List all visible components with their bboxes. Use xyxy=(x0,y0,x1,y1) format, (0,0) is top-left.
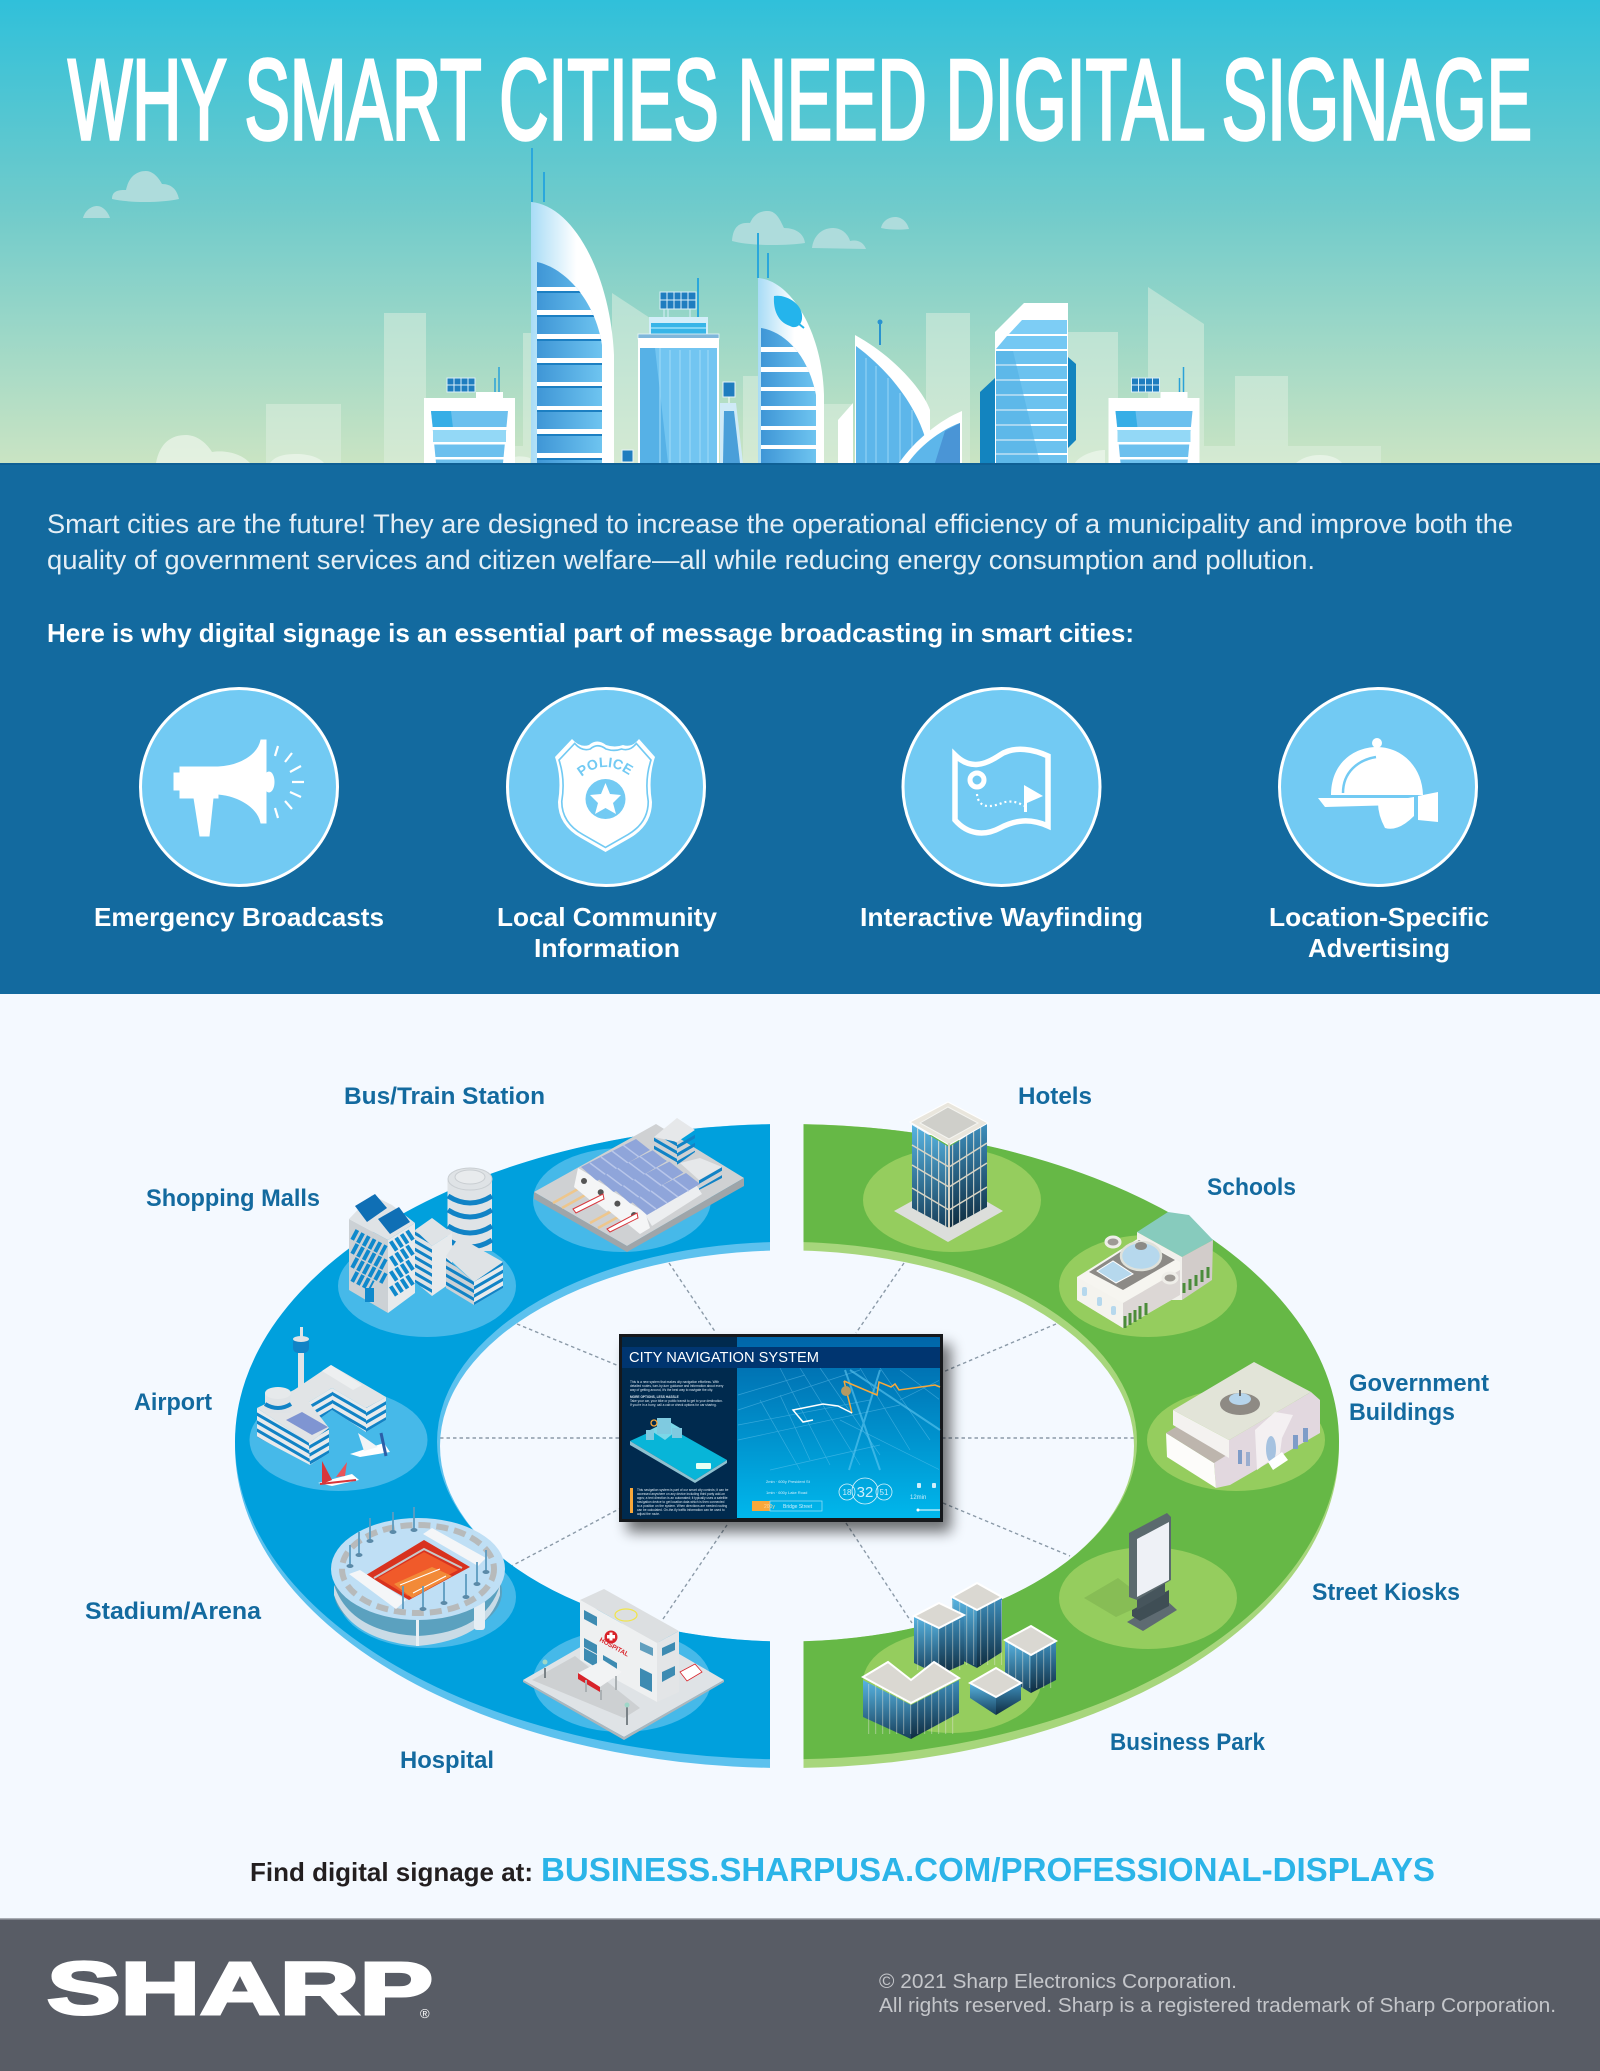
monitor dashboard: Bridge Street xyxy=(783,1504,813,1510)
left panel xyxy=(622,1337,737,1519)
tower three xyxy=(1005,1626,1056,1693)
monitor body text: If you're in a hurry, call a cab or check options for car sharing. xyxy=(630,1403,717,1407)
illustration: street kiosk xyxy=(1084,1513,1177,1631)
monitor body text: to a position on the system. When directions are needed routing xyxy=(637,1504,727,1508)
header sky panel xyxy=(0,0,1600,464)
monitor body text: can be calculated. On-the-fly traffic information can be used to xyxy=(637,1508,725,1512)
copyright: All rights reserved. Sharp is a registered trademark of Sharp Corporation. xyxy=(879,1995,1556,2017)
tower one xyxy=(914,1603,964,1675)
monitor body text: accessed anywhere on any device including third party add-on xyxy=(637,1492,725,1496)
icon: megaphone xyxy=(174,740,304,836)
monitor dashboard: 200y xyxy=(764,1504,775,1510)
copyright xyxy=(879,1971,1556,2017)
label: shopping malls: Shopping Malls xyxy=(146,1185,320,1212)
label: street kiosks: Street Kiosks xyxy=(1312,1579,1460,1606)
illustration: shopping malls xyxy=(349,1168,503,1313)
title band xyxy=(622,1347,940,1368)
monitor body text: adjust the route. xyxy=(637,1512,660,1516)
building: curved glass tower xyxy=(838,320,962,463)
intro text: Smart cities are the future! They are designed to increase the operational efficiency of a municipality and improve both the xyxy=(47,509,1513,539)
monitor dashboard: 2min · 600y President St xyxy=(766,1479,811,1484)
entrance canopy xyxy=(578,1660,622,1687)
illustration: airport xyxy=(257,1327,390,1486)
small block xyxy=(970,1668,1021,1715)
central monitor xyxy=(619,1334,951,1532)
monitor body text xyxy=(630,1380,729,1516)
tall block with solar roof xyxy=(349,1219,388,1313)
item: local community information: Local Community xyxy=(497,902,718,932)
building: right small tower xyxy=(1108,367,1200,464)
label: stadium/arena: Stadium/Arena xyxy=(85,1598,262,1625)
tower two xyxy=(952,1583,1002,1668)
hospital sign xyxy=(604,1630,618,1644)
sharp logo xyxy=(47,1947,433,2030)
icon: map with flag xyxy=(955,749,1048,833)
low block xyxy=(446,1237,503,1282)
subheading: Here is why digital signage is an essential part of message broadcasting in smart cities: xyxy=(47,618,1134,648)
label: government buildings: Buildings xyxy=(1349,1399,1455,1426)
illustration: stadium xyxy=(331,1507,505,1646)
trains xyxy=(573,1194,638,1232)
monitor body text: This is a new system that makes city navigation effortless. With xyxy=(630,1380,719,1384)
illustration: hospital xyxy=(523,1589,724,1740)
ring: right green half xyxy=(804,1124,1339,1768)
label: business park: Business Park xyxy=(1110,1729,1266,1756)
illustration: hotel xyxy=(894,1102,1003,1242)
call to action: Find digital signage at: xyxy=(250,1857,533,1887)
label: hotels: Hotels xyxy=(1018,1083,1092,1110)
illustration: bus/train station xyxy=(534,1118,744,1252)
monitor dashboard: 32 xyxy=(857,1484,873,1501)
monitor body text: Take your car, your bike or public transit to get to your destination. xyxy=(630,1399,723,1403)
lamp posts xyxy=(545,1668,627,1725)
monitor dashboard: 1min · 600y Lake Road xyxy=(766,1490,807,1495)
building: angular tower xyxy=(980,303,1076,463)
illustration: business park xyxy=(863,1583,1056,1739)
lower terminal wing xyxy=(257,1387,329,1465)
illustration: school xyxy=(1077,1212,1213,1328)
map panel xyxy=(737,1337,940,1518)
label: bus/train station: Bus/Train Station xyxy=(344,1083,545,1110)
item: local community information: Information xyxy=(534,933,680,963)
dotted connector lines xyxy=(440,1263,1134,1623)
mid block xyxy=(415,1218,452,1246)
monitor dashboard xyxy=(752,1478,940,1512)
item: local community information xyxy=(497,687,718,963)
monitor body text: MORE OPTIONS, LESS HASSLE xyxy=(630,1395,679,1399)
upper terminal wing xyxy=(291,1365,386,1432)
monitor dashboard: 51 xyxy=(880,1488,889,1497)
label: schools: Schools xyxy=(1207,1174,1296,1201)
label: hospital: Hospital xyxy=(400,1747,494,1774)
monitor body text: This navigation system is part of our smart city controls; it can be xyxy=(637,1488,729,1492)
monitor isometric phone graphic xyxy=(630,1418,727,1483)
icon: police badge: POLICE xyxy=(576,758,634,776)
control tower xyxy=(293,1327,309,1392)
footer xyxy=(0,1918,1600,2071)
panel: intro xyxy=(0,463,1600,994)
monitor body text: navigation device to get location data which is then connected xyxy=(637,1500,725,1504)
foreground pale clouds xyxy=(156,435,1342,463)
illustration: government building xyxy=(1166,1362,1320,1488)
sharp logo: ® xyxy=(420,2006,430,2021)
cylinder tower xyxy=(448,1168,492,1251)
icon: leaf xyxy=(774,296,804,328)
monitor body text: way of getting around, it's the best way to navigate the city. xyxy=(630,1388,713,1392)
monitor body text: apps; a text direction is an automated; it typically uses a satellite xyxy=(637,1496,728,1500)
title band: CITY NAVIGATION SYSTEM xyxy=(629,1350,819,1366)
intro text: quality of government services and citizen welfare—all while reducing energy consumption and pollution. xyxy=(47,545,1315,575)
building: solar roof glass tower xyxy=(638,278,719,464)
ring labels xyxy=(85,1083,1489,1774)
building: tall sail tower xyxy=(531,148,614,463)
ring: left blue half xyxy=(235,1124,770,1768)
L-shaped block xyxy=(863,1662,959,1739)
monitor dashboard: 18 xyxy=(843,1488,852,1497)
planes xyxy=(318,1433,390,1486)
building: left small tower xyxy=(424,367,515,464)
building: small solar annex xyxy=(622,382,743,463)
item: emergency broadcasts xyxy=(94,688,384,932)
item: location-specific advertising: Location-Specific xyxy=(1269,902,1489,932)
icon: cloche and hand xyxy=(1318,738,1438,829)
item: location-specific advertising: Advertising xyxy=(1308,933,1450,963)
item: interactive wayfinding: Interactive Wayfinding xyxy=(860,902,1143,932)
icon: police badge xyxy=(555,739,655,852)
background skyline silhouettes xyxy=(266,287,1381,464)
item: emergency broadcasts: Emergency Broadcasts xyxy=(94,902,384,932)
sky clouds xyxy=(83,171,909,249)
illustration: hospital: HOSPITAL xyxy=(598,1637,630,1658)
sharp logo: SHARP xyxy=(47,1947,433,2030)
intro text xyxy=(47,509,1513,575)
monitor body text: detailed routes, turn-by-turn guidance and information about every xyxy=(630,1384,724,1388)
monitor dashboard: 12min xyxy=(910,1495,926,1501)
label: airport: Airport xyxy=(134,1389,212,1416)
building: sail tower with leaf xyxy=(758,233,824,463)
copyright: © 2021 Sharp Electronics Corporation. xyxy=(879,1971,1237,1993)
label: government buildings: Government xyxy=(1349,1370,1489,1397)
ambulance xyxy=(680,1664,702,1681)
item: location-specific advertising xyxy=(1269,688,1489,963)
item: interactive wayfinding xyxy=(860,688,1143,932)
call to action: BUSINESS.SHARPUSA.COM/PROFESSIONAL-DISPLAYS xyxy=(541,1851,1435,1888)
last shed side wall xyxy=(641,1180,702,1226)
